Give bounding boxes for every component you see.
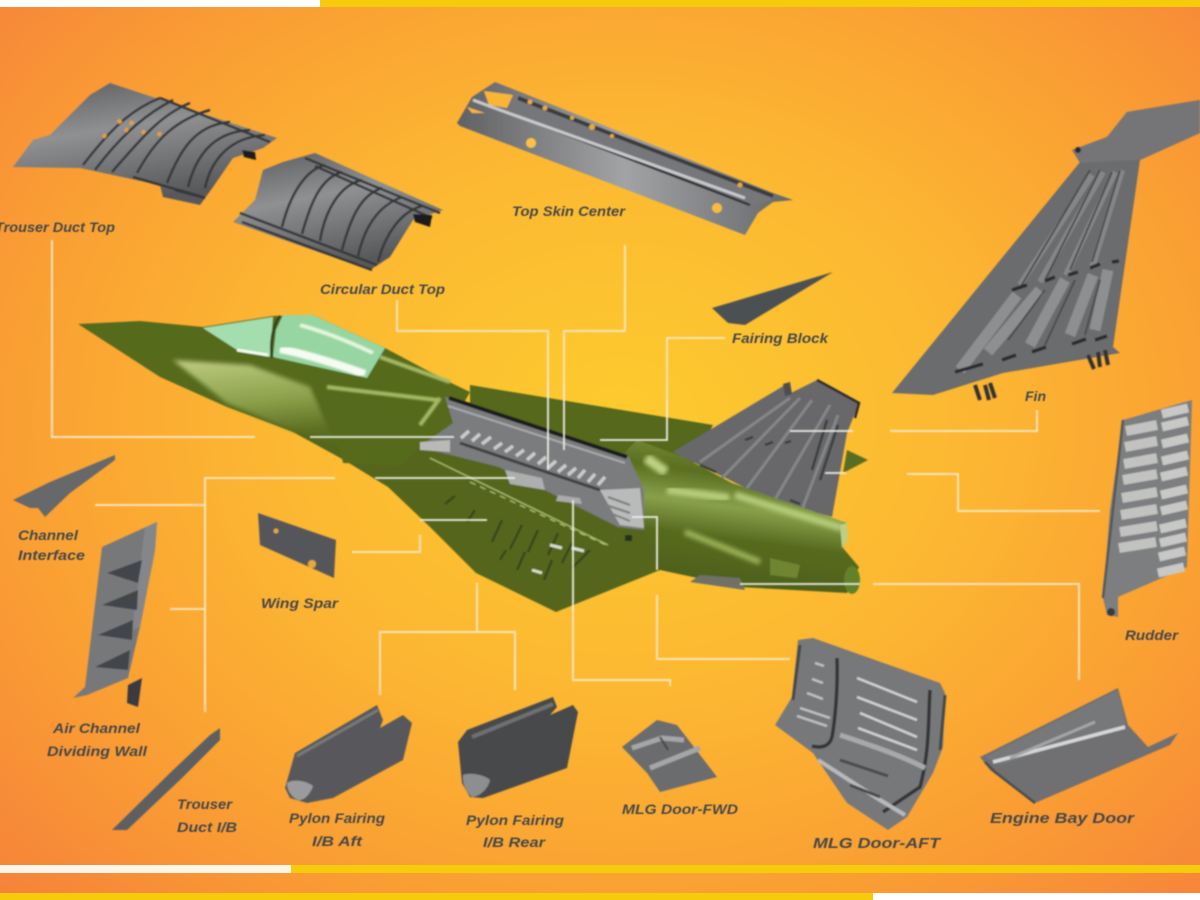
- top border band: [0, 0, 1200, 7]
- label: air channel dividing wall: [47, 720, 148, 759]
- part: trouser duct top: [13, 83, 277, 205]
- aircraft: main cutaway model: [78, 315, 868, 612]
- label: MLG door forward: MLG Door-FWD: [622, 801, 738, 817]
- label: air channel dividing wall: Air Channel: [52, 720, 141, 736]
- label: pylon fairing rear: [466, 812, 564, 850]
- label: pylon fairing aft: I/B Aft: [312, 833, 364, 849]
- part: fin: [892, 100, 1200, 400]
- tail fin: [673, 380, 868, 517]
- part: channel interface: [13, 455, 115, 517]
- label: pylon fairing aft: [289, 810, 385, 849]
- near wing: [293, 390, 700, 612]
- engine nacelle: [625, 440, 860, 594]
- leader lines behind aircraft: [52, 240, 1100, 712]
- nose light underside: [173, 360, 332, 437]
- part: wing spar: [258, 513, 336, 578]
- label: wing spar: Wing Spar: [261, 595, 340, 611]
- label: fin: Fin: [1025, 388, 1046, 404]
- strake: [313, 388, 427, 447]
- part: circular duct top: [233, 153, 443, 270]
- label: channel interface: [18, 527, 85, 563]
- label: engine bay door: Engine Bay Door: [990, 810, 1135, 827]
- part: MLG door aft: [775, 638, 945, 830]
- label: top skin center: Top Skin Center: [512, 203, 627, 219]
- label: trouser duct inboard: Duct I/B: [177, 819, 237, 835]
- label: air channel dividing wall: Dividing Wall: [47, 743, 148, 759]
- wing slots: [445, 496, 590, 580]
- nose and forward fuselage: [78, 315, 470, 465]
- label: channel interface: Channel: [18, 527, 79, 543]
- label: pylon fairing aft: Pylon Fairing: [289, 810, 385, 826]
- part: pylon fairing aft: [285, 705, 412, 803]
- far wing: [470, 385, 713, 470]
- bottom border bands: [0, 865, 1200, 900]
- label: fairing block: Fairing Block: [732, 330, 829, 346]
- label: trouser duct inboard: [177, 796, 237, 835]
- label: MLG door aft: MLG Door-AFT: [813, 835, 942, 852]
- part: engine bay door: [980, 688, 1178, 803]
- part: rudder: [1103, 400, 1192, 617]
- label: circular duct top: Circular Duct Top: [320, 281, 445, 297]
- label: pylon fairing rear: Pylon Fairing: [466, 812, 564, 828]
- part: trouser duct inboard: [112, 728, 220, 830]
- label: channel interface: Interface: [18, 547, 85, 563]
- canopy: [203, 315, 385, 378]
- label: pylon fairing rear: I/B Rear: [483, 834, 547, 850]
- part: fairing block: [712, 272, 833, 325]
- fuselage highlight: [327, 357, 450, 425]
- part: MLG door forward: [622, 720, 717, 792]
- cutaway bay: [419, 397, 644, 541]
- part: top skin center: [457, 82, 793, 235]
- part: air channel dividing wall: [73, 522, 157, 707]
- part: pylon fairing rear: [458, 697, 578, 798]
- leader lines over aircraft: [310, 380, 860, 612]
- label: trouser duct inboard: Trouser: [177, 796, 234, 812]
- label: rudder: Rudder: [1125, 627, 1180, 643]
